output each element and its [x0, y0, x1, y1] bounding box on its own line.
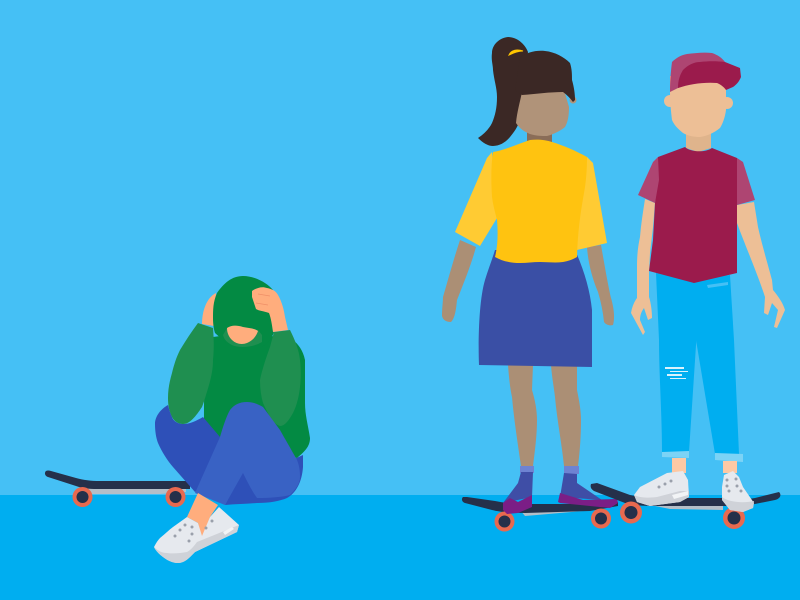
- cap brim: [678, 61, 741, 90]
- figure: sitting teen with head in hands: [154, 276, 310, 563]
- sock and shoe: right: [558, 466, 618, 508]
- ankles: [672, 458, 686, 473]
- ears: [664, 95, 676, 107]
- shirt: [649, 147, 737, 283]
- neck: [527, 130, 552, 144]
- face: [516, 90, 569, 136]
- skirt: [479, 250, 592, 367]
- ground: [0, 495, 800, 600]
- hand: right, on head: [252, 287, 288, 332]
- jeans rips: [665, 367, 688, 379]
- hood: [213, 276, 274, 347]
- arm: right: [587, 245, 614, 325]
- lower leg shadow: [225, 455, 303, 505]
- shoe: [154, 507, 239, 563]
- jeans: left leg: [656, 273, 700, 452]
- pocket highlight: [707, 282, 728, 288]
- arm: left: [631, 199, 655, 335]
- cuffs: [662, 451, 689, 458]
- shoe: left: [634, 471, 689, 506]
- neck: [686, 130, 711, 152]
- arm: right: [737, 202, 785, 328]
- cap back: [670, 53, 725, 92]
- skateboard: left, beside sitting teen: [45, 470, 190, 507]
- front leg: [195, 402, 300, 505]
- shoe sole: [154, 525, 239, 563]
- sleeve: right: [260, 330, 301, 426]
- hair tie: [509, 50, 523, 55]
- ankle: [187, 493, 218, 540]
- face: [670, 76, 726, 137]
- torso: green hoodie: [204, 332, 310, 458]
- sleeve: left: [455, 152, 497, 246]
- hair: [515, 51, 575, 102]
- sock and shoe: left: [503, 466, 534, 514]
- shoe: right: [722, 471, 754, 512]
- shoe heel patch: [223, 527, 234, 535]
- sleeve: right: [572, 157, 607, 250]
- skateboard: right, under boy: [591, 483, 780, 529]
- shirt: [491, 140, 587, 263]
- figure: girl in yellow top and blue skirt: [442, 37, 618, 514]
- face: [227, 326, 258, 344]
- figure: boy in maroon shirt, cap and jeans: [631, 53, 785, 512]
- sleeve: left: [168, 323, 214, 424]
- hand: left, on head: [202, 293, 216, 326]
- sleeves: [638, 157, 659, 203]
- jeans: right leg: [690, 275, 739, 454]
- legs: [508, 365, 537, 466]
- ponytail: [478, 37, 528, 146]
- arm: left: [442, 240, 476, 322]
- skateboard: middle, under girl: [462, 497, 618, 532]
- hood inner rim: [223, 328, 262, 347]
- back leg: [155, 405, 225, 492]
